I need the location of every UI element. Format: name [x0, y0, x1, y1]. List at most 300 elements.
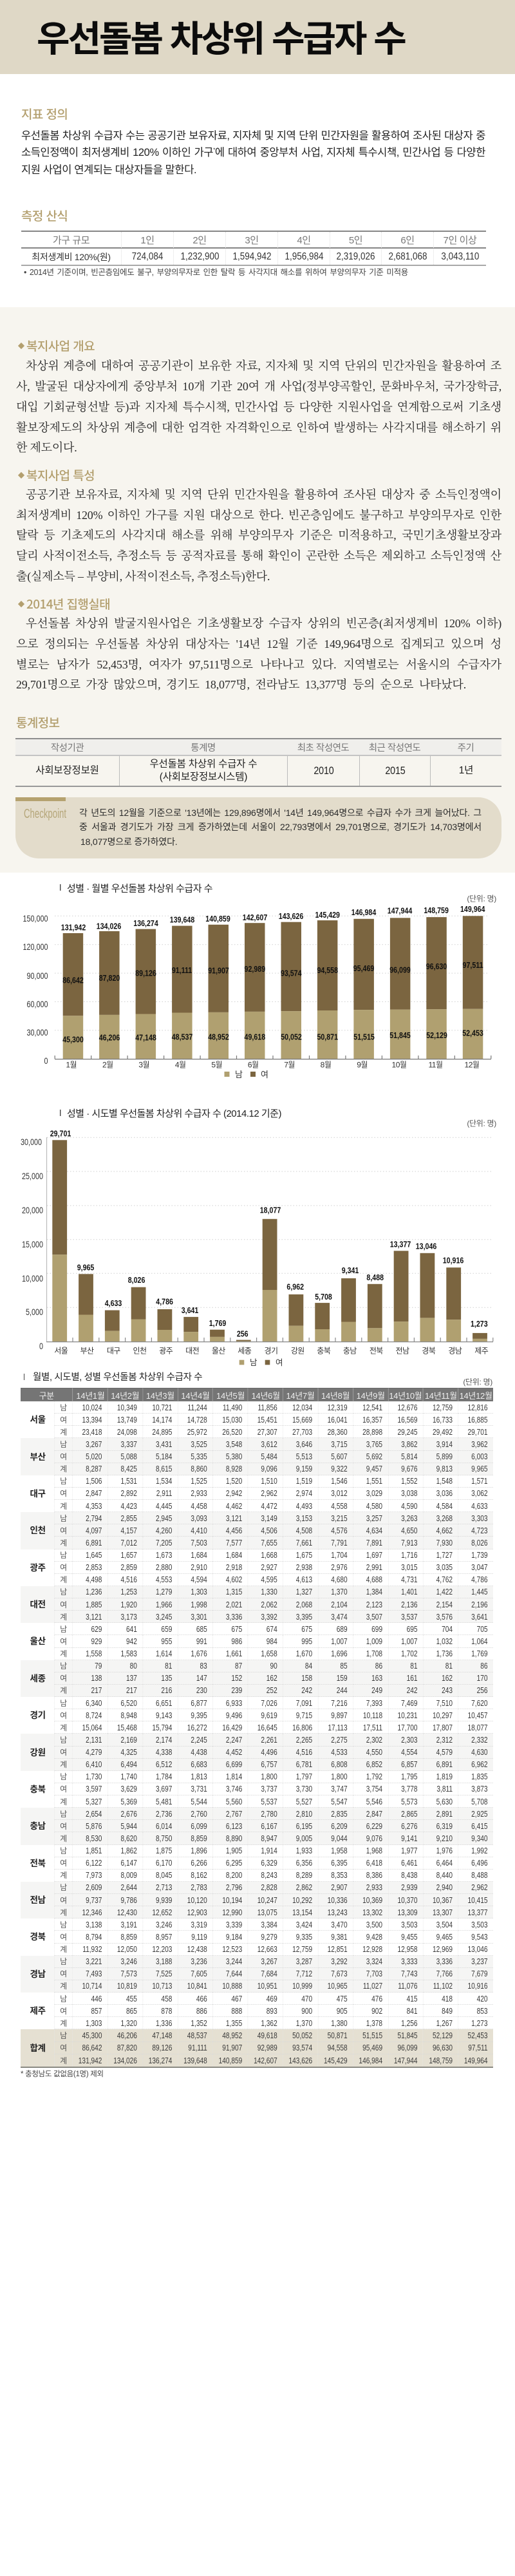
table: monthly recipients by region and gender: 계 [60, 2055, 67, 2066]
table: monthly recipients by region and gender: 6,122 [86, 1858, 102, 1868]
table: monthly recipients by region and gender: 10,247 [258, 1895, 277, 1905]
table: monthly recipients by region and gender: 458 [161, 1994, 172, 2003]
table: monthly recipients by region and gender: 9,381 [331, 1932, 348, 1942]
x axis labels [66, 1060, 479, 1069]
panel: welfare programme description [0, 307, 515, 873]
table: monthly recipients by region and gender: 888 [231, 2006, 242, 2016]
table: monthly recipients by region and gender: 3,237 [471, 1956, 487, 1966]
table: monthly recipients by region and gender: 2,925 [471, 1809, 487, 1819]
table: monthly recipients by region and gender: 942 [126, 1636, 137, 1646]
table: monthly recipients by region and gender: 3,336 [436, 1956, 453, 1966]
table: monthly recipients by region and gender: 1,506 [86, 1476, 102, 1486]
table: monthly recipients by region and gender: 1,330 [261, 1587, 277, 1596]
table: monthly recipients by region and gender: 1,370 [296, 2018, 312, 2028]
table: monthly recipients by region and gender: 14,174 [152, 1415, 172, 1425]
table: monthly recipients by region and gender: 13,394 [82, 1415, 102, 1425]
table: monthly recipients by region and gender: 25,972 [187, 1427, 207, 1437]
total value labels: 4,633 [105, 1298, 122, 1308]
table: monthly recipients by region and gender [21, 1388, 493, 2068]
table: monthly recipients by region and gender: 3,576 [436, 1612, 453, 1622]
table: monthly recipients by region and gender: 3,424 [296, 1920, 312, 1929]
table: monthly recipients by region and gender: 2,991 [366, 1562, 382, 1572]
x axis baseline [55, 1056, 491, 1059]
table: monthly recipients by region and gender: 6,295 [226, 1858, 242, 1868]
table: monthly recipients by region and gender: 계 [60, 1426, 67, 1437]
female value labels [62, 960, 483, 985]
y axis labels: 15,000 [22, 1240, 43, 1249]
male value labels: 52,453 [462, 1028, 483, 1038]
table: monthly recipients by region and gender: 7,673 [331, 1969, 348, 1978]
table: statistics information: 최근 작성연도 [369, 743, 420, 753]
table: monthly recipients by region and gender: 8,530 [86, 1833, 102, 1843]
x axis labels: 대구 [107, 1346, 120, 1355]
table: monthly recipients by region and gender: 6,496 [471, 1858, 487, 1868]
table: monthly recipients by region and gender: 469 [267, 1994, 277, 2003]
table: monthly recipients by region and gender: 5,708 [471, 1797, 487, 1806]
table: monthly recipients by region and gender: 6,512 [156, 1759, 172, 1769]
total value labels: 10,916 [443, 1255, 464, 1265]
table: monthly recipients by region and gender: 16,645 [258, 1723, 277, 1732]
table: monthly recipients by region and gender: 89,126 [152, 2043, 172, 2052]
table: monthly recipients by region and gender: 8,289 [296, 1870, 312, 1880]
legend [224, 1070, 268, 1079]
female value labels: 87,820 [99, 973, 120, 983]
total value labels: 142,607 [243, 913, 268, 922]
table: monthly recipients by region and gender: 2,196 [471, 1600, 487, 1609]
x axis labels: 4월 [175, 1060, 186, 1069]
table: monthly recipients by region and gender: 29,245 [398, 1427, 418, 1437]
y axis labels: 5,000 [26, 1307, 43, 1317]
total value labels: 18,077 [260, 1206, 281, 1215]
table: monthly recipients by region and gender: 136,274 [149, 2056, 172, 2065]
total value labels: 6,962 [286, 1282, 304, 1292]
table: monthly recipients by region and gender: 5,560 [226, 1797, 242, 1806]
table: monthly recipients by region and gender: 4,590 [401, 1501, 418, 1511]
table: monthly recipients by region and gender: 1,676 [191, 1649, 207, 1658]
table: monthly recipients by region and gender: 3,333 [401, 1956, 418, 1966]
table: monthly recipients by region and gender: 여 [60, 1636, 67, 1647]
table: monthly recipients by region and gender: 2,938 [296, 1562, 312, 1572]
table: monthly recipients by region and gender: 12,958 [398, 1944, 418, 1954]
table: monthly recipients by region and gender: 6,808 [331, 1759, 348, 1769]
table: monthly recipients by region and gender: 4,731 [401, 1575, 418, 1584]
table: monthly recipients by region and gender: 3,336 [226, 1612, 242, 1622]
table: monthly recipients by region and gender: 16,569 [398, 1415, 418, 1425]
table: monthly recipients by region and gender: 1,851 [86, 1846, 102, 1855]
text block: programme characteristics: 공공기관 보유자료, 지자체 및 지역 단위 민간자원을 활용하여 조사된 대상자 중 소득인정액이 [26, 488, 501, 501]
table: monthly recipients by region and gender: 12,759 [433, 1403, 453, 1412]
table: monthly recipients by region and gender: 2,644 [121, 1882, 137, 1892]
table: monthly recipients by region and gender: 7,393 [366, 1698, 382, 1708]
table: monthly recipients by region and gender: 3,149 [261, 1513, 277, 1523]
x axis labels: 서울 [54, 1346, 68, 1355]
table: monthly recipients by region and gender: 남 [60, 1513, 67, 1524]
table: monthly recipients by region and gender: 131,942 [79, 2056, 102, 2065]
table: monthly recipients by region and gender: 705 [477, 1624, 487, 1634]
table: monthly recipients by region and gender: 4,602 [226, 1575, 242, 1584]
table: monthly recipients by region and gender: 146,984 [359, 2056, 382, 2065]
total value labels: 9,965 [77, 1262, 95, 1273]
table: monthly recipients by region and gender: 29,701 [467, 1427, 487, 1437]
table: monthly recipients by region and gender: 7,503 [191, 1538, 207, 1548]
table: monthly recipients by region and gender: 2,303 [401, 1735, 418, 1745]
table: monthly recipients by region and gender: 10,118 [363, 1710, 382, 1720]
table: monthly recipients by region and gender: 남 [60, 1660, 67, 1671]
table: monthly recipients by region and gender: 466 [196, 1994, 207, 2003]
table: monthly recipients by region and gender: 광주 [30, 1563, 45, 1573]
table: monthly recipients by region and gender: 계 [60, 1870, 67, 1880]
table: monthly recipients by region and gender: 3,062 [471, 1488, 487, 1498]
table: monthly recipients by region and gender: 2,940 [436, 1882, 453, 1892]
table: monthly recipients by region and gender: 10,916 [467, 1981, 487, 1991]
table: monthly recipients by region and gender: 10,194 [222, 1895, 242, 1905]
table: monthly recipients by region and gender: 12,034 [292, 1403, 312, 1412]
y axis labels: 30,000 [21, 1137, 42, 1147]
x axis labels: 강원 [291, 1346, 304, 1355]
chart: monthly recipients by gender [23, 884, 496, 1079]
table: monthly recipients by region and gender: 인천 [30, 1526, 45, 1535]
table: monthly recipients by region and gender: 3,263 [401, 1513, 418, 1523]
table: monthly recipients by region and gender: 1,814 [226, 1772, 242, 1781]
table: monthly recipients by region and gender: 47,148 [152, 2031, 172, 2040]
table: monthly recipients by region and gender: 991 [196, 1636, 207, 1646]
table: monthly recipients by region and gender: 170 [477, 1673, 487, 1683]
table: monthly recipients by region and gender: 1,534 [156, 1476, 172, 1486]
table: monthly recipients by region and gender: 남 [60, 1845, 67, 1856]
table: monthly recipients by region and gender: 3,597 [86, 1784, 102, 1794]
text block: programme characteristics [16, 488, 501, 583]
table: monthly recipients by region and gender: 1,007 [401, 1636, 418, 1646]
unit label: (단위: 명) [467, 1119, 496, 1128]
text block: definition [21, 130, 485, 176]
table: monthly recipients by region and gender: 여 [60, 2005, 67, 2016]
table: monthly recipients by region and gender: 2,169 [121, 1735, 137, 1745]
table: monthly recipients by region and gender: 6,461 [401, 1858, 418, 1868]
table: monthly recipients by region and gender: 13,377 [467, 1908, 487, 1917]
table: monthly recipients by region and gender: 139,648 [183, 2056, 207, 2065]
x axis labels: 세종 [238, 1346, 252, 1355]
table: monthly recipients by region and gender: 8,794 [86, 1932, 102, 1942]
table: monthly recipients by region and gender: 699 [371, 1624, 382, 1634]
table: monthly recipients by region and gender: 12,928 [362, 1944, 382, 1954]
table: monthly recipients by region and gender: 12,990 [222, 1908, 242, 1917]
table: monthly recipients by region and gender: 계 [60, 2018, 67, 2029]
total value labels [50, 1129, 488, 1339]
female value labels: 92,989 [245, 964, 265, 974]
table: monthly recipients by region and gender: 2,933 [191, 1488, 207, 1498]
table: monthly recipients by region and gender: 9,897 [331, 1710, 348, 1720]
legend: 남 [250, 1358, 258, 1367]
table: monthly recipients by region and gender: 6,395 [331, 1858, 348, 1868]
table: monthly recipients by region and gender: 145,429 [324, 2056, 348, 2065]
table: monthly recipients by region and gender: 4,723 [471, 1526, 487, 1535]
table: monthly recipients by region and gender: 5,546 [366, 1797, 382, 1806]
table: monthly recipients by region and gender: 4,594 [191, 1575, 207, 1584]
table: monthly recipients by region and gender: 137 [126, 1673, 137, 1683]
text block: definition: 지원 사업이 연계되는 대상자들을 말한다. [21, 164, 196, 176]
table: monthly recipients by region and gender: 12,346 [82, 1908, 102, 1917]
table: monthly recipients by region and gender: 5,020 [86, 1452, 102, 1461]
table: monthly recipients by region and gender: 3,221 [86, 1956, 102, 1966]
table: monthly recipients by region and gender: 1,551 [366, 1476, 382, 1486]
table: monthly recipients by region and gender: 여 [60, 1710, 67, 1721]
table: monthly recipients by region and gender: 14년7월 [286, 1391, 315, 1400]
table: monthly recipients by region and gender: 7,766 [436, 1969, 453, 1978]
table: monthly recipients by region and gender: 12,652 [152, 1908, 172, 1917]
table: monthly recipients by region and gender: 857 [91, 2006, 102, 2016]
table: monthly recipients by region and gender: 1,378 [366, 2018, 382, 2028]
table: statistics information: 1년 [459, 765, 473, 776]
table: monthly recipients by region and gender: 7,605 [191, 1969, 207, 1978]
table: monthly recipients by region and gender: 14,728 [187, 1415, 207, 1425]
stacked bars: female [52, 1140, 487, 1341]
text block: programme overview: 차상위 계층에 대하여 공공기관이 보유한 자료, 지자체 및 지역 단위의 민간자원을 활용하여 조 [26, 359, 501, 372]
table: monthly recipients by region and gender: 878 [161, 2006, 172, 2016]
table: monthly recipients by region and gender: 3,629 [121, 1784, 137, 1794]
y axis labels: 120,000 [23, 942, 48, 952]
table: monthly recipients by region and gender: 161 [407, 1673, 418, 1683]
table: monthly recipients by region and gender: 2,962 [261, 1488, 277, 1498]
table: monthly recipients by region and gender: 1,875 [156, 1846, 172, 1855]
female value labels: 96,630 [426, 961, 447, 971]
table: monthly recipients by region and gender: 3,093 [191, 1513, 207, 1523]
table: minimum cost of living: 2,681,068 [388, 251, 427, 261]
table: monthly recipients by region and gender: 13,046 [467, 1944, 487, 1954]
table: monthly recipients by region and gender: 3,778 [401, 1784, 418, 1794]
table: monthly recipients by region and gender: 8,200 [226, 1870, 242, 1880]
table: monthly recipients by region and gender: 4,516 [296, 1747, 312, 1757]
male value labels: 45,300 [62, 1035, 84, 1045]
table: monthly recipients by region and gender: 1,675 [296, 1550, 312, 1560]
female value labels: 93,574 [281, 969, 302, 978]
table: monthly recipients by region and gender: 3,503 [471, 1920, 487, 1929]
table: monthly recipients by region and gender: 2,676 [121, 1809, 137, 1819]
table: monthly recipients by region and gender: 4,456 [226, 1526, 242, 1535]
table: monthly recipients by region and gender: 1,684 [191, 1550, 207, 1560]
heading: 2014 status: 2014년 집행실태 [26, 595, 110, 612]
table: monthly recipients by region and gender: 6,276 [401, 1821, 418, 1831]
female value labels: 86,642 [62, 975, 84, 985]
table: monthly recipients by region and gender: 2,131 [86, 1735, 102, 1745]
table: monthly recipients by region and gender: 13,243 [328, 1908, 348, 1917]
table: monthly recipients by region and gender: 여 [60, 1931, 67, 1942]
table: monthly recipients by region and gender: 93,574 [292, 2043, 312, 2052]
table: monthly recipients by region and gender: 689 [337, 1624, 348, 1634]
table: statistics information: 우선돌봄 차상위 수급자 수 [149, 759, 257, 770]
table: monthly recipients by region and gender: 7,469 [401, 1698, 418, 1708]
callout label: Checkpoint [24, 807, 66, 821]
table: monthly recipients by region and gender: 1,380 [331, 2018, 348, 2028]
table: monthly recipients by region and gender: 1,531 [121, 1476, 137, 1486]
table: monthly recipients by region and gender: 50,871 [328, 2031, 348, 2040]
table: monthly recipients by region and gender: 4,458 [191, 1501, 207, 1511]
table: monthly recipients by region and gender: 5,899 [436, 1452, 453, 1461]
table: monthly recipients by region and gender: 남 [60, 2030, 67, 2041]
table: monthly recipients by region and gender: 1,977 [401, 1846, 418, 1855]
total value labels: 256 [237, 1329, 248, 1339]
table: monthly recipients by region and gender: 217 [91, 1685, 102, 1695]
table: monthly recipients by region and gender: 계 [60, 1722, 67, 1733]
table: monthly recipients by region and gender: 계 [60, 1944, 67, 1955]
table: monthly recipients by region and gender: 2,780 [261, 1809, 277, 1819]
table: monthly recipients by region and gender: 2,907 [331, 1882, 348, 1892]
table: monthly recipients by region and gender: 4,630 [471, 1747, 487, 1757]
chart title: 성별 · 시도별 우선돌봄 차상위 수급자 수 (2014.12 기준) [67, 1108, 281, 1119]
table: monthly recipients by region and gender: 9,141 [401, 1833, 418, 1843]
table: monthly recipients by region and gender: 1,303 [86, 2018, 102, 2028]
table: monthly recipients by region and gender: 4,516 [121, 1575, 137, 1584]
table: minimum cost of living: 7인 이상 [444, 234, 476, 246]
table: monthly recipients by region and gender: 12,969 [433, 1944, 453, 1954]
table: monthly recipients by region and gender: 28,898 [362, 1427, 382, 1437]
table: monthly recipients by region and gender: 4,553 [156, 1575, 172, 1584]
table: monthly recipients by region and gender: 3,507 [366, 1612, 382, 1622]
table: monthly recipients by region and gender: 5,184 [156, 1452, 172, 1461]
total value labels: 3,641 [182, 1305, 199, 1315]
table: monthly recipients by region and gender: 7,679 [471, 1969, 487, 1978]
table: monthly recipients by region and gender: 6,852 [366, 1759, 382, 1769]
text block: 2014 status: 으로 정의되는 우선돌봄 차상위 대상자는 '14년 12월 기준 149,964명으로 집계되고 있으며 성 [16, 638, 501, 650]
table: monthly recipients by region and gender: 1,510 [261, 1476, 277, 1486]
table: monthly recipients by region and gender: 8,162 [191, 1870, 207, 1880]
table: monthly recipients by region and gender: 5,481 [156, 1797, 172, 1806]
table: monthly recipients by region and gender: 1,661 [226, 1649, 242, 1658]
table: monthly recipients by region and gender: 남 [60, 1402, 67, 1413]
table: monthly recipients by region and gender: 1,673 [156, 1550, 172, 1560]
table: monthly recipients by region and gender: 2,609 [86, 1882, 102, 1892]
table: monthly recipients by region and gender: 4,584 [436, 1501, 453, 1511]
table: monthly recipients by region and gender: 7,577 [226, 1538, 242, 1548]
table: monthly recipients by region and gender: 9,143 [156, 1710, 172, 1720]
table: monthly recipients by region and gender: 3,287 [296, 1956, 312, 1966]
male value labels: 51,845 [389, 1030, 411, 1040]
x axis labels: 충북 [317, 1346, 331, 1355]
table: monthly recipients by region and gender: 1,519 [296, 1476, 312, 1486]
table: monthly recipients by region and gender: 3,731 [191, 1784, 207, 1794]
total value labels: 143,626 [279, 911, 304, 921]
table: monthly recipients by region and gender: 138 [91, 1673, 102, 1683]
table: monthly recipients by region and gender: 9,619 [261, 1710, 277, 1720]
total value labels: 13,046 [416, 1241, 437, 1251]
table: monthly recipients by region and gender: 계 [60, 1833, 67, 1844]
table: monthly recipients by region and gender: 16,429 [222, 1723, 242, 1732]
table: monthly recipients by region and gender: 남 [60, 1624, 67, 1634]
panel: indicator definition [21, 105, 485, 176]
table: monthly recipients by region and gender: 3,036 [436, 1488, 453, 1498]
table: monthly recipients by region and gender: 7,973 [86, 1870, 102, 1880]
table: monthly recipients by region and gender: 1,716 [401, 1550, 418, 1560]
table: monthly recipients by region and gender: 4,558 [331, 1501, 348, 1511]
table: monthly recipients by region and gender: 1,696 [331, 1649, 348, 1658]
table: monthly recipients by region and gender: 8,615 [156, 1464, 172, 1473]
callout: checkpoint [15, 797, 501, 858]
table: monthly recipients by region and gender: 1,445 [471, 1587, 487, 1596]
table: monthly recipients by region and gender: 134,026 [113, 2056, 137, 2065]
table: monthly recipients by region and gender: 6,651 [156, 1698, 172, 1708]
x axis labels: 경기 [265, 1346, 277, 1355]
table: monthly recipients by region and gender: 1,819 [436, 1772, 453, 1781]
text block: programme overview: 활보장제도의 차상위 계층에 대한 엄격한 자격확인으로 인하여 발생하는 사각지대를 해소하기 위 [16, 421, 501, 434]
table: monthly recipients by region and gender: 8,750 [156, 1833, 172, 1843]
total value labels: 134,026 [97, 921, 122, 931]
table: monthly recipients by region and gender: 1,727 [436, 1550, 453, 1560]
table: monthly recipients by region and gender: 2,312 [436, 1735, 453, 1745]
table: monthly recipients by region and gender: 12,203 [152, 1944, 172, 1954]
table: monthly recipients by region and gender: 13,307 [433, 1908, 453, 1917]
table: monthly recipients by region and gender: 대구 [30, 1489, 45, 1499]
total value labels: 9,341 [342, 1265, 359, 1275]
table: monthly recipients by region and gender: 2,910 [191, 1562, 207, 1572]
female value labels: 97,511 [463, 960, 483, 970]
table: monthly recipients by region and gender: 1,384 [366, 1587, 382, 1596]
table: monthly recipients by region and gender: 10,349 [117, 1403, 137, 1412]
table: monthly recipients by region and gender: 18,077 [467, 1723, 487, 1732]
table: monthly recipients by region and gender: 2,891 [436, 1809, 453, 1819]
x axis labels: 인천 [133, 1346, 146, 1355]
table: monthly recipients by region and gender: 6,757 [261, 1759, 277, 1769]
table: monthly recipients by region and gender: 10,999 [292, 1981, 312, 1991]
table: monthly recipients by region and gender: 152 [231, 1673, 242, 1683]
table: monthly recipients by region and gender: 2,760 [191, 1809, 207, 1819]
table: monthly recipients by region and gender: 1,253 [121, 1587, 137, 1596]
table: monthly recipients by region and gender: 3,301 [191, 1612, 207, 1622]
table: monthly recipients by region and gender: 4,452 [226, 1747, 242, 1757]
table: statistics information: 작성기관 [51, 743, 84, 753]
table: monthly recipients by region and gender: 3,153 [296, 1513, 312, 1523]
table: monthly recipients by region and gender: 27,703 [292, 1427, 312, 1437]
table: minimum cost of living: 가구 규모 [53, 234, 89, 246]
table: monthly recipients by region and gender: 929 [91, 1636, 102, 1646]
table: monthly recipients by region and gender: 1,352 [191, 2018, 207, 2028]
table: monthly recipients by region and gender: 계 [60, 1537, 67, 1548]
table: monthly recipients by region and gender: 3,337 [121, 1439, 137, 1449]
total value labels: 29,701 [50, 1129, 71, 1139]
table: monthly recipients by region and gender: 886 [196, 2006, 207, 2016]
table: monthly recipients by region and gender: 3,537 [401, 1612, 418, 1622]
table: monthly recipients by region and gender: 여 [60, 1968, 67, 1979]
table: monthly recipients by region and gender: 1,702 [401, 1649, 418, 1658]
table: monthly recipients by region and gender: 서울 [30, 1415, 45, 1425]
table: statistics information: 2010 [314, 765, 333, 777]
table: monthly recipients by region and gender: 244 [337, 1685, 348, 1695]
table: monthly recipients by region and gender: 8,353 [331, 1870, 348, 1880]
table: monthly recipients by region and gender: 2,104 [331, 1600, 348, 1609]
table: monthly recipients by region and gender: 1,813 [191, 1772, 207, 1781]
table: monthly recipients by region and gender: 7,913 [401, 1538, 418, 1548]
table: monthly recipients by region and gender: 1,920 [121, 1600, 137, 1609]
table: monthly recipients by region and gender: 2,933 [366, 1882, 382, 1892]
table: monthly recipients by region and gender: 경남 [30, 1969, 45, 1979]
table: monthly recipients by region and gender: 1,422 [436, 1587, 453, 1596]
table: monthly recipients by region and gender: 12,676 [398, 1403, 418, 1412]
table: monthly recipients by region and gender: 4,533 [331, 1747, 348, 1757]
table: monthly recipients by region and gender: 3,962 [471, 1439, 487, 1449]
table: monthly recipients by region and gender: 14년8월 [321, 1391, 350, 1400]
table: monthly recipients by region and gender: 6,340 [86, 1698, 102, 1708]
table: monthly recipients by region and gender: 계 [60, 1574, 67, 1585]
table: monthly recipients by region and gender: 1,992 [471, 1846, 487, 1855]
table: monthly recipients by region and gender: 79 [95, 1661, 102, 1671]
table: monthly recipients by region and gender: 7,743 [401, 1969, 418, 1978]
table: monthly recipients by region and gender: 계 [60, 1611, 67, 1622]
table: monthly recipients by region and gender: 9,496 [226, 1710, 242, 1720]
table: monthly recipients by region and gender: 2,261 [261, 1735, 277, 1745]
y axis labels [23, 914, 48, 1066]
table: monthly recipients by region and gender: 17,113 [328, 1723, 348, 1732]
table: monthly recipients by region and gender: 8,947 [261, 1833, 277, 1843]
table: monthly recipients by region and gender: 남 [60, 1475, 67, 1486]
table: monthly recipients by region and gender: 3,715 [331, 1439, 348, 1449]
